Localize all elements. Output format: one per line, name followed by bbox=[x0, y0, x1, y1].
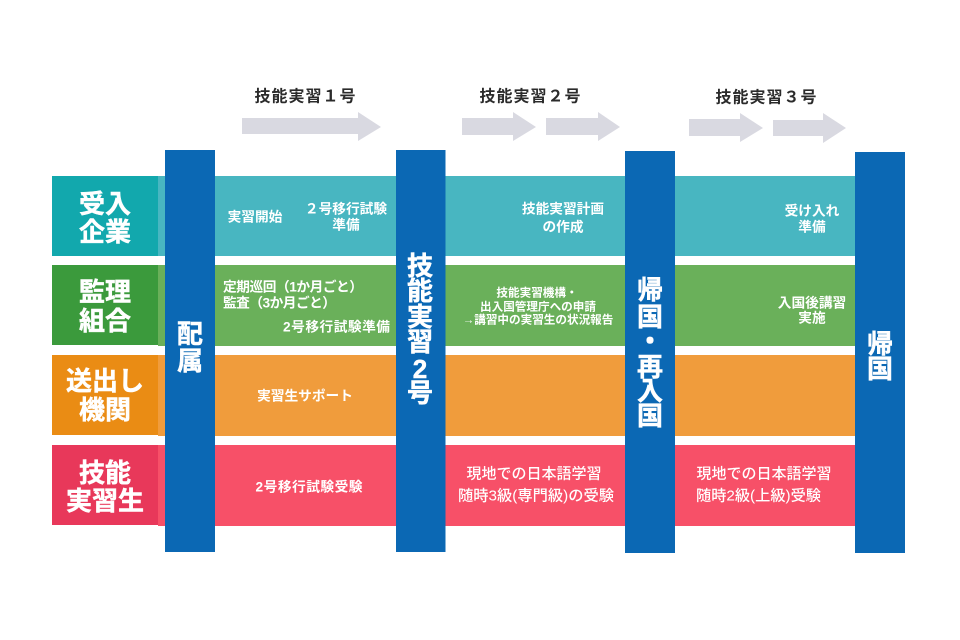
column: 帰国・再入国 bbox=[625, 151, 675, 553]
note: 日本語学習 2級: 現地での日本語学習 bbox=[696, 466, 832, 482]
note: 技能実習計画の作成: の作成 bbox=[542, 218, 584, 234]
column: 帰国: 国 bbox=[867, 354, 893, 384]
note: 日本語学習 3級 bbox=[458, 466, 614, 504]
note: 日本語学習 2級: 随時2級(上級)受験 bbox=[696, 486, 821, 504]
column: 技能実習2号 bbox=[396, 150, 446, 552]
header: 技能実習3号: 技能実習３号 bbox=[716, 88, 816, 106]
note: 2号移行試験準備: 準備 bbox=[332, 216, 360, 232]
note: 技能実習機構への申請: 出入国管理庁への申請 bbox=[480, 300, 596, 314]
arrow: stage 3 second bbox=[773, 113, 846, 143]
note: 受け入れ準備 bbox=[785, 202, 840, 234]
column: 帰国 bbox=[855, 152, 905, 553]
arrow: stage 1 bbox=[242, 112, 381, 141]
row label: 技能実習生: 技能 bbox=[79, 458, 131, 488]
row label: 受入企業: 企業 bbox=[79, 217, 131, 247]
column: 帰国・再入国: 再 bbox=[637, 352, 663, 382]
row label: 技能実習生 bbox=[52, 445, 158, 525]
row label: 受入企業: 受入 bbox=[79, 189, 131, 219]
column: 技能実習2号: 能 bbox=[407, 276, 433, 306]
column: 帰国: 帰 bbox=[867, 329, 893, 359]
note: 日本語学習 3級: 現地での日本語学習 bbox=[466, 466, 602, 482]
note: 2号移行試験準備: ２号移行試験 bbox=[305, 200, 387, 216]
row label: 送出し機関 bbox=[52, 355, 158, 435]
note: 2号移行試験受験: 2号移行試験受験 bbox=[256, 478, 363, 494]
column: 技能実習2号: 実 bbox=[407, 302, 433, 332]
column: 技能実習2号: 号 bbox=[407, 378, 433, 408]
column: 配属: 配 bbox=[177, 319, 203, 349]
note: 受け入れ準備: 準備 bbox=[798, 218, 826, 234]
header: 技能実習2号: 技能実習２号 bbox=[480, 86, 580, 106]
note: 技能実習機構への申請 bbox=[463, 286, 613, 326]
note: 定期巡回・監査: 監査（3か月ごと） bbox=[223, 294, 336, 310]
arrow: stage 2 first bbox=[462, 112, 536, 141]
column: 帰国・再入国: 入 bbox=[637, 376, 663, 406]
note: 2号移行試験準備 bbox=[305, 200, 387, 232]
note: 日本語学習 2級 bbox=[696, 466, 832, 504]
row label: 監理組合 bbox=[52, 265, 158, 345]
note: 入国後講習実施: 実施 bbox=[798, 310, 826, 326]
header: 技能実習1号: 技能実習１号 bbox=[254, 86, 356, 106]
row: 受入企業 bbox=[52, 176, 856, 256]
note: 定期巡回・監査: 定期巡回（1か月ごと） bbox=[223, 278, 363, 294]
column: 帰国・再入国: ・ bbox=[637, 326, 663, 356]
note: 実習生サポート: 実習生サポート bbox=[257, 388, 353, 404]
column: 技能実習2号: 2 bbox=[413, 354, 427, 384]
column: 配属 bbox=[165, 150, 215, 552]
row label: 送出し機関: 機関 bbox=[79, 395, 131, 425]
note: 技能実習機構への申請: 技能実習機構・ bbox=[496, 286, 578, 300]
note: 実習開始: 実習開始 bbox=[228, 208, 283, 224]
note: 技能実習計画の作成: 技能実習計画 bbox=[522, 200, 604, 216]
column: 帰国・再入国: 帰 bbox=[637, 275, 663, 305]
column: 帰国・再入国: 国 bbox=[637, 302, 663, 332]
header: 技能実習3号 bbox=[689, 88, 846, 143]
note: 2号移行試験準備: 2号移行試験準備 bbox=[283, 318, 390, 334]
column: 技能実習2号: 技 bbox=[407, 251, 433, 281]
header: 技能実習2号 bbox=[462, 86, 620, 141]
row label: 受入企業 bbox=[52, 176, 158, 256]
note: 入国後講習実施: 入国後講習 bbox=[778, 294, 846, 310]
note: 入国後講習実施 bbox=[778, 294, 846, 326]
row label: 監理組合: 監理 bbox=[79, 277, 131, 307]
row label: 送出し機関: 送出し bbox=[66, 366, 144, 396]
row: 監理組合 bbox=[52, 265, 856, 346]
note: 受け入れ準備: 受け入れ bbox=[785, 202, 840, 218]
row label: 監理組合: 組合 bbox=[79, 306, 131, 336]
column: 帰国・再入国: 国 bbox=[637, 401, 663, 431]
row label: 技能実習生: 実習生 bbox=[66, 486, 144, 516]
row: 技能実習生 bbox=[52, 445, 856, 526]
row: 送出し機関 bbox=[52, 355, 856, 436]
header: 技能実習1号 bbox=[242, 86, 381, 141]
arrow: stage 2 second bbox=[546, 112, 620, 141]
note: 技能実習計画の作成 bbox=[522, 200, 604, 234]
note: 技能実習機構への申請: →講習中の実習生の状況報告 bbox=[463, 312, 613, 326]
column: 配属: 属 bbox=[177, 346, 203, 376]
note: 日本語学習 3級: 随時3級(専門級)の受験 bbox=[458, 486, 614, 504]
column: 技能実習2号: 習 bbox=[407, 327, 433, 357]
arrow: stage 3 first bbox=[689, 113, 763, 142]
note: 定期巡回・監査 bbox=[223, 278, 363, 310]
